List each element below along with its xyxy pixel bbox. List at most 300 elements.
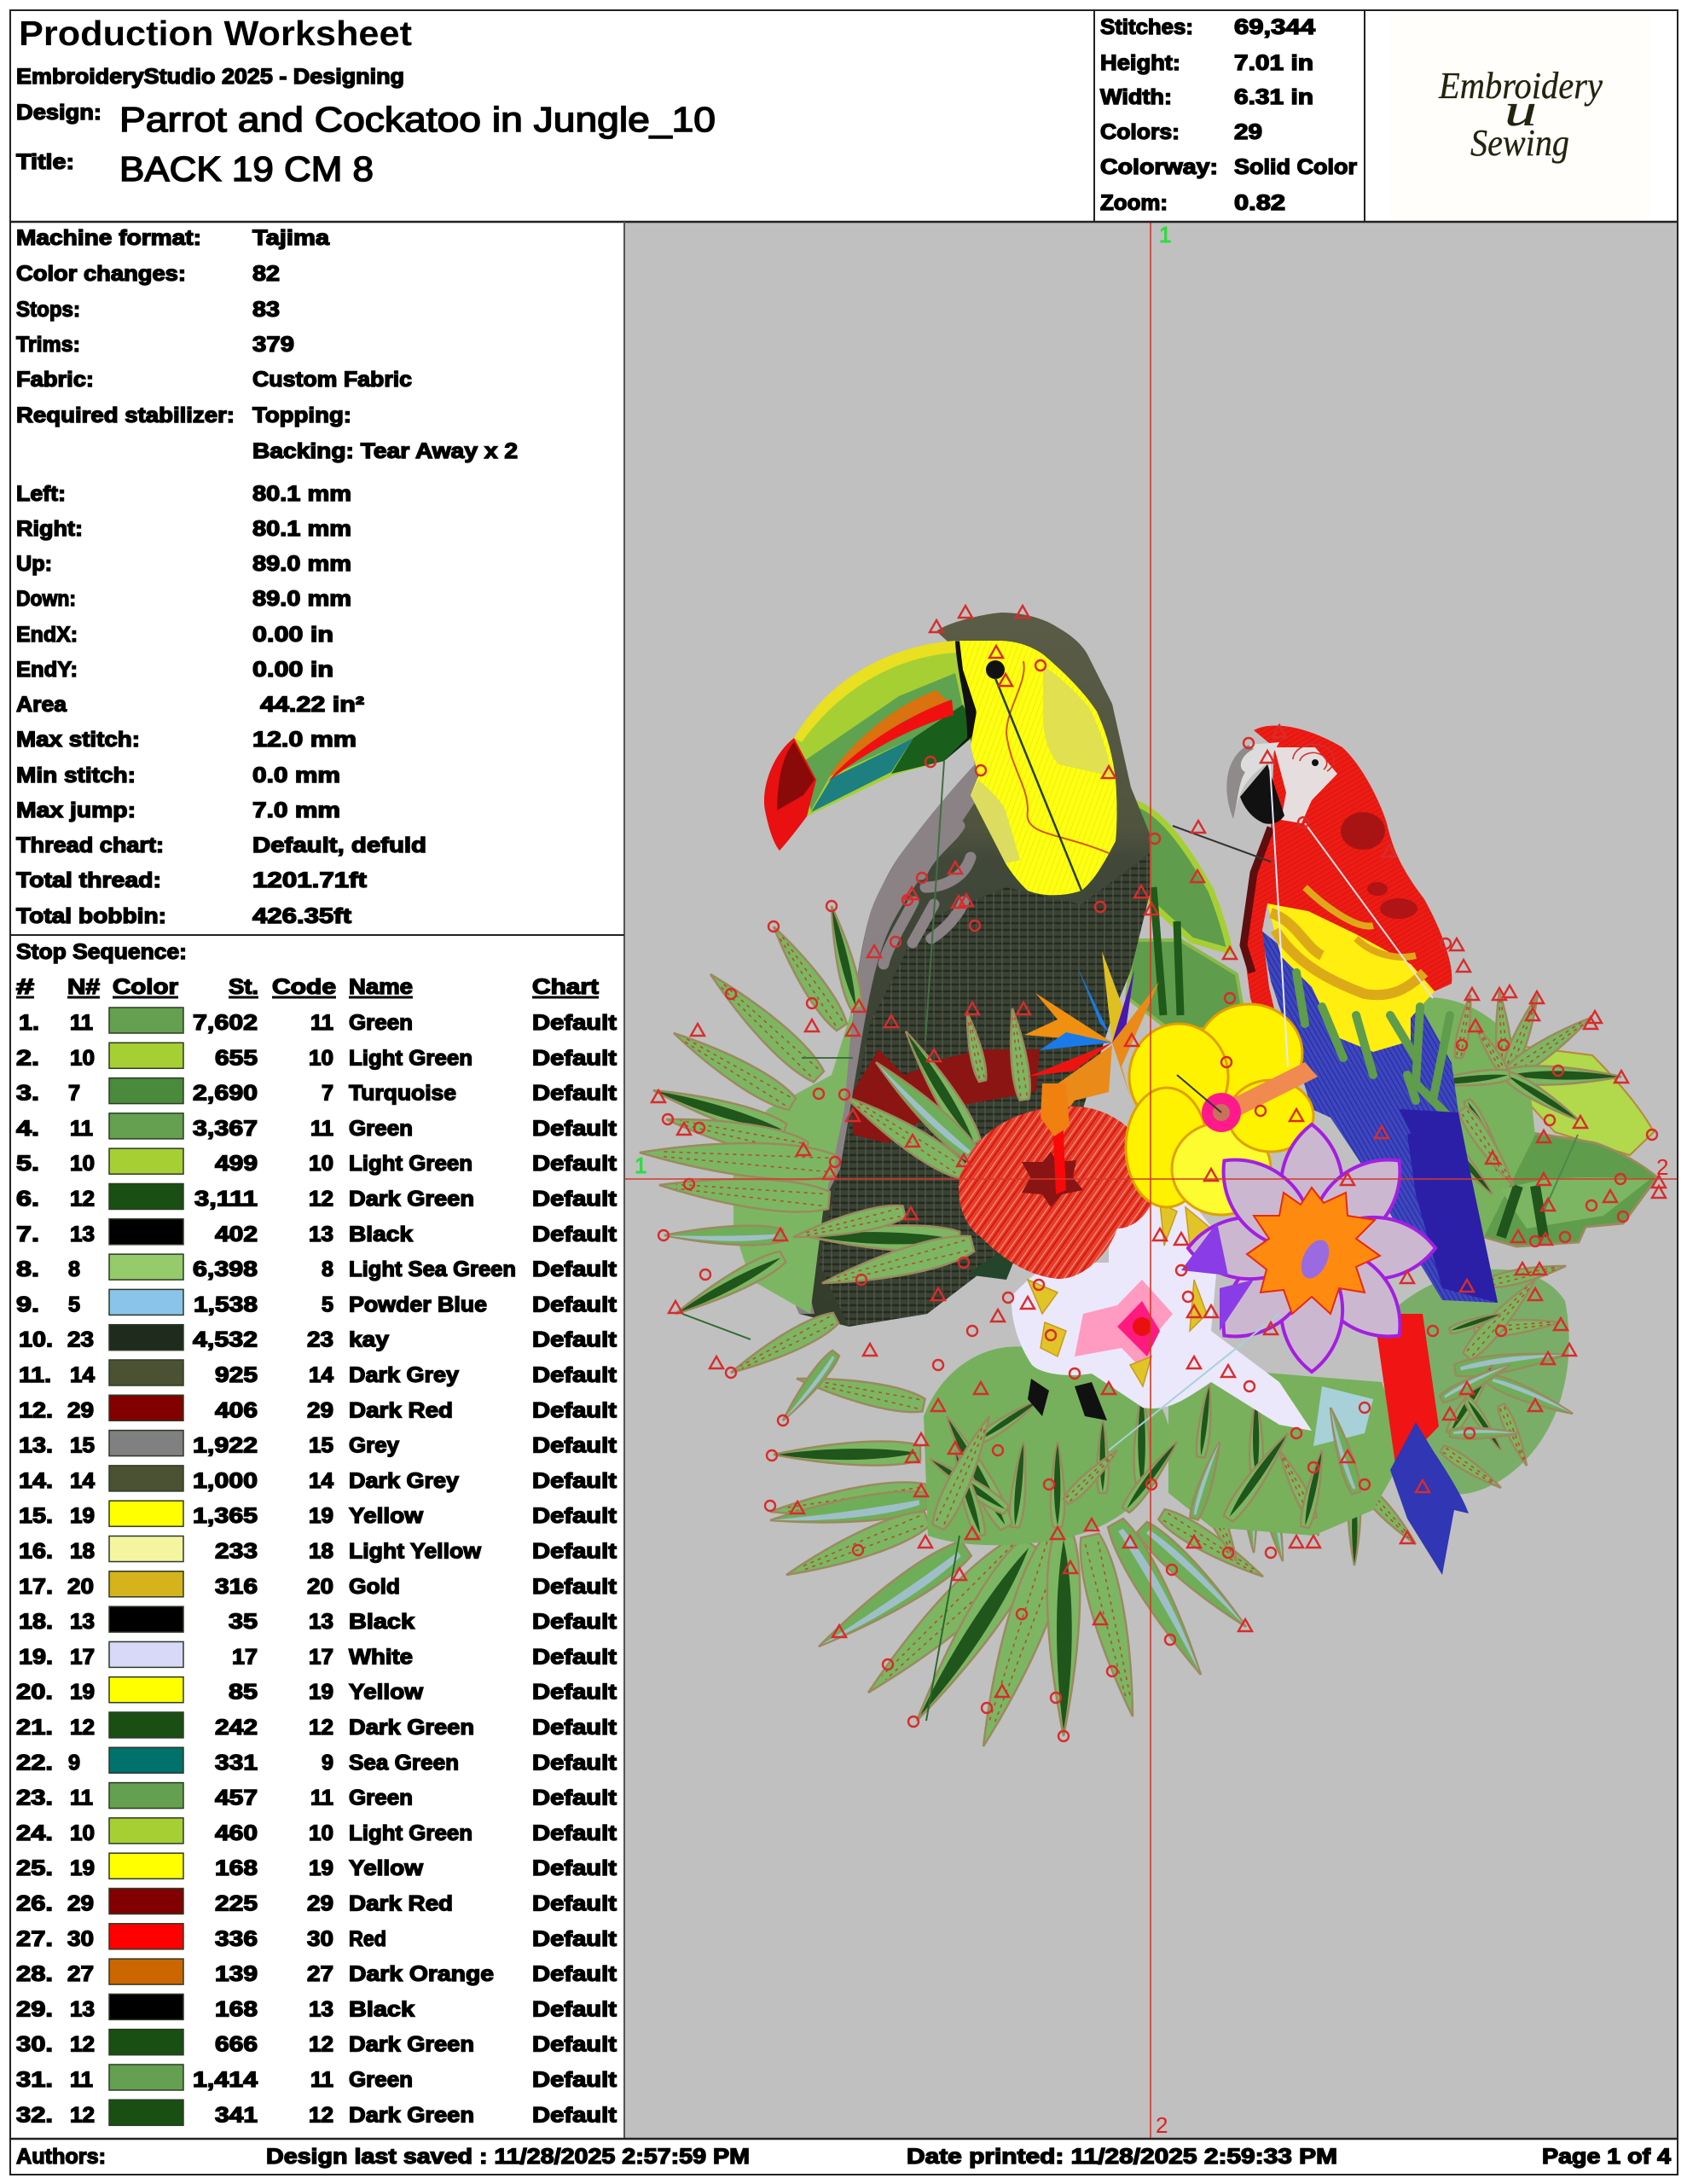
row 8: Default: [532, 1258, 617, 1281]
toucan: [764, 613, 1150, 1327]
row 26: 29: [67, 1892, 94, 1916]
axis label 1 left: 1: [635, 1153, 646, 1178]
machine and design details: Backing: Tear Away x 2: [252, 439, 518, 463]
row 30: Default: [532, 2033, 617, 2057]
table column headers: St.: [229, 975, 258, 999]
row 32: 341: [215, 2103, 258, 2127]
title value: BACK 19 CM 8: [119, 149, 374, 189]
row 23: 457: [215, 1786, 258, 1810]
row 29: 13: [70, 1997, 95, 2021]
row 25: 25.: [16, 1856, 53, 1880]
row 30: 12: [70, 2033, 95, 2057]
footer: Date printed: 11/28/2025 2:59:33 PM: [907, 2145, 1337, 2169]
row 26: Default: [532, 1892, 617, 1916]
row 24: 460: [215, 1821, 258, 1845]
row 10: [19, 1325, 617, 1352]
center crosshair lines: [625, 223, 1677, 2139]
row 22: 9: [68, 1751, 80, 1774]
row 28: 27: [307, 1962, 333, 1986]
macaw face: [1274, 747, 1337, 823]
heading block: [16, 14, 716, 189]
machine and design details: 0.00 in: [252, 658, 333, 682]
row 19: 17: [309, 1645, 333, 1669]
table column headers: Color: [113, 975, 178, 999]
machine and design details: Custom Fabric: [252, 368, 412, 392]
row 17: 17.: [19, 1575, 53, 1599]
machine and design details: 0.00 in: [252, 623, 333, 647]
row 6: Default: [532, 1188, 617, 1211]
row 4: Green: [349, 1117, 413, 1141]
row 27: 336: [215, 1927, 258, 1951]
design summary stats: 29: [1234, 120, 1262, 144]
row 1: Green: [349, 1011, 413, 1035]
machine and design details: 44.22 in²: [260, 693, 364, 717]
machine and design details: Color changes:: [16, 262, 186, 286]
stop sequence table: [16, 940, 617, 2127]
row 22: 331: [215, 1751, 258, 1774]
row 9: 5: [68, 1292, 80, 1316]
lower right leaf cluster: [1399, 1259, 1575, 1494]
row 14: [19, 1466, 617, 1493]
row 5: 499: [215, 1152, 258, 1176]
row 5: 10: [70, 1152, 95, 1176]
logo: Embroidery U Sewing: u: [1504, 84, 1537, 136]
row 24: 10: [309, 1821, 333, 1845]
macaw green feathers: [1296, 973, 1450, 1118]
row 5: 10: [309, 1152, 333, 1176]
row 23: 11: [70, 1786, 93, 1810]
row 20: 19: [70, 1681, 95, 1705]
machine and design details: 7.0 mm: [252, 799, 340, 822]
row 29: [16, 1994, 617, 2021]
row 25: 19: [309, 1856, 333, 1880]
machine and design details: Machine format:: [16, 226, 201, 250]
row 12: 12.: [19, 1398, 53, 1422]
row 30: 666: [215, 2033, 258, 2057]
row 4: [16, 1113, 617, 1141]
row 7: [16, 1219, 617, 1246]
row 2: 2.: [16, 1046, 39, 1070]
row 19: White: [349, 1645, 413, 1669]
row 17: 20: [307, 1575, 333, 1599]
row 7: 7.: [16, 1223, 39, 1246]
row 2: 10: [309, 1046, 333, 1070]
row 10: 23: [307, 1328, 333, 1352]
macaw: [1226, 726, 1498, 1575]
machine and design details: [16, 226, 518, 928]
machine and design details: Area: [16, 693, 67, 717]
row 11: 925: [215, 1363, 258, 1387]
row 6: [16, 1184, 617, 1211]
row 32: Default: [532, 2103, 617, 2127]
row 11: Dark Grey: [349, 1363, 459, 1387]
design name: Parrot and Cockatoo in Jungle_10: [119, 100, 716, 139]
row 26: 26.: [16, 1892, 53, 1916]
row 4: 3,367: [193, 1117, 258, 1141]
design label: Design:: [16, 101, 101, 125]
row 3: 7: [68, 1082, 80, 1106]
row 27: 30: [307, 1927, 333, 1951]
row 21: Default: [532, 1716, 617, 1740]
row 1: Default: [532, 1011, 617, 1035]
row 3: Default: [532, 1082, 617, 1106]
row 12: Default: [532, 1398, 617, 1422]
row 5: Light Green: [349, 1152, 472, 1176]
table column headers: [16, 975, 600, 999]
row 19: 17: [70, 1645, 95, 1669]
row 29: 13: [309, 1997, 333, 2021]
row 13: Grey: [349, 1434, 399, 1458]
row 19: 19.: [19, 1645, 53, 1669]
row 25: Default: [532, 1856, 617, 1880]
machine and design details: EndX:: [16, 623, 78, 647]
row 17: Gold: [349, 1575, 400, 1599]
row 30: [16, 2030, 617, 2057]
machine and design details: Topping:: [252, 404, 351, 427]
machine and design details: Right:: [16, 517, 83, 541]
row 9: Default: [532, 1292, 617, 1316]
axis label 2 bottom: 2: [1156, 2112, 1168, 2138]
logo: Embroidery U Sewing: Embroidery: [1438, 65, 1603, 107]
white plumeria flower: [1012, 1194, 1312, 1431]
row 2: 10: [70, 1046, 95, 1070]
row 31: Default: [532, 2068, 617, 2092]
machine and design details: 80.1 mm: [252, 482, 351, 506]
row 28: 139: [215, 1962, 258, 1986]
machine and design details: Stops:: [16, 298, 80, 322]
row 14: 14: [309, 1469, 333, 1493]
row 28: [16, 1959, 617, 1986]
design summary stats: 7.01 in: [1234, 51, 1313, 75]
macaw lower wing over purple flower: [1399, 1109, 1498, 1303]
row 18: 18.: [19, 1610, 53, 1634]
row 17: [19, 1571, 617, 1599]
stitch connector lines: [682, 751, 1578, 1721]
design summary stats: Colors:: [1100, 120, 1180, 144]
row 20: Default: [532, 1681, 617, 1705]
logo: Embroidery U Sewing: Sewing: [1470, 122, 1569, 164]
machine and design details: 89.0 mm: [252, 587, 351, 611]
row 4: 4.: [16, 1117, 39, 1141]
row 19: [19, 1641, 617, 1669]
row 9: Powder Blue: [349, 1292, 487, 1316]
machine and design details: 82: [252, 262, 280, 286]
row 26: [16, 1889, 617, 1916]
row 17: 20: [67, 1575, 94, 1599]
row 10: kay: [349, 1328, 389, 1352]
row 9: [16, 1289, 617, 1316]
row 8: Light Sea Green: [349, 1258, 516, 1281]
row 29: 29.: [16, 1997, 53, 2021]
row 14: 1,000: [193, 1469, 258, 1493]
row 22: 9: [322, 1751, 333, 1774]
machine and design details: 379: [252, 333, 294, 357]
machine and design details: Total bobbin:: [16, 904, 166, 928]
table column headers: #: [16, 975, 34, 999]
row 18: Default: [532, 1610, 617, 1634]
machine and design details: Down:: [16, 587, 76, 611]
yellow hibiscus flower: [1126, 1004, 1318, 1215]
machine and design details: 426.35ft: [252, 904, 352, 928]
row 7: 13: [309, 1223, 333, 1246]
row 12: [19, 1395, 617, 1422]
row 16: Default: [532, 1539, 617, 1563]
row 15: 15.: [19, 1504, 53, 1528]
row 19: 17: [232, 1645, 258, 1669]
row 6: 12: [70, 1188, 95, 1211]
row 7: 402: [215, 1223, 258, 1246]
row 13: 13.: [19, 1434, 53, 1458]
machine and design details: Fabric:: [16, 368, 94, 392]
row 14: 14: [70, 1469, 95, 1493]
row 10: 23: [67, 1328, 94, 1352]
table column headers: Chart: [532, 975, 600, 999]
row 16: 18: [70, 1539, 95, 1563]
row 25: 168: [215, 1856, 258, 1880]
row 6: 6.: [16, 1188, 39, 1211]
row 23: [16, 1783, 617, 1810]
machine and design details: Max stitch:: [16, 728, 140, 752]
row 28: 28.: [16, 1962, 53, 1986]
row 25: [16, 1853, 617, 1880]
row 31: [16, 2065, 617, 2092]
needle markers: [652, 606, 1666, 1741]
row 8: 8: [322, 1258, 333, 1281]
machine and design details: Left:: [16, 482, 66, 506]
row 11: 14: [309, 1363, 333, 1387]
row 30: Dark Green: [349, 2033, 474, 2057]
row 3: 7: [322, 1082, 333, 1106]
row 4: Default: [532, 1117, 617, 1141]
row 29: Default: [532, 1997, 617, 2021]
row 8: [16, 1254, 617, 1281]
row 14: Dark Grey: [349, 1469, 459, 1493]
row 13: 15: [70, 1434, 95, 1458]
row 10: 10.: [19, 1328, 53, 1352]
row 15: 1,365: [193, 1504, 258, 1528]
row 9: 9.: [16, 1292, 39, 1316]
machine and design details: 12.0 mm: [252, 728, 357, 752]
row 12: 29: [307, 1398, 333, 1422]
toucan yellow face: [959, 641, 1117, 895]
row 32: 12: [309, 2103, 333, 2127]
row 12: 29: [67, 1398, 94, 1422]
row 24: 10: [70, 1821, 95, 1845]
machine and design details: 1201.71ft: [252, 868, 368, 892]
machine and design details: 0.0 mm: [252, 764, 340, 787]
row 3: [16, 1078, 617, 1106]
row 18: 13: [70, 1610, 95, 1634]
row 5: 5.: [16, 1152, 39, 1176]
artwork panel: grey fabric: [624, 222, 1677, 2139]
row 1: [19, 1008, 617, 1035]
row 16: [19, 1536, 617, 1563]
row 11: 11.: [19, 1363, 51, 1387]
row 30: 30.: [16, 2033, 53, 2057]
row 28: 27: [67, 1962, 94, 1986]
title label: Title:: [16, 150, 74, 174]
row 23: 23.: [16, 1786, 53, 1810]
row 21: [16, 1712, 617, 1740]
table column headers: N#: [67, 975, 100, 999]
row 31: 11: [70, 2068, 93, 2092]
design summary stats: Height:: [1100, 51, 1180, 75]
machine and design details: 80.1 mm: [252, 517, 351, 541]
machine and design details: 83: [252, 298, 280, 322]
row 31: 31.: [16, 2068, 53, 2092]
row 26: Dark Red: [349, 1892, 453, 1916]
row 12: 406: [215, 1398, 258, 1422]
macaw blue body: [1261, 930, 1498, 1303]
row 1: 11: [310, 1011, 333, 1035]
row 21: 12: [70, 1716, 95, 1740]
row 15: Yellow: [349, 1504, 424, 1528]
design summary stats: Solid Color: [1234, 155, 1357, 179]
purple passion flower: [1181, 1124, 1435, 1372]
row 32: Dark Green: [349, 2103, 474, 2127]
red hibiscus flower: [959, 1083, 1155, 1279]
row 9: 5: [322, 1292, 333, 1316]
design summary stats: 6.31 in: [1234, 85, 1313, 109]
row 32: 32.: [16, 2103, 53, 2127]
row 6: 12: [309, 1188, 333, 1211]
software line: EmbroideryStudio 2025 - Designing: [16, 65, 404, 89]
row 20: Yellow: [349, 1681, 424, 1705]
table column headers: Code: [272, 975, 336, 999]
machine and design details: Max jump:: [16, 799, 136, 822]
row 4: 11: [310, 1117, 333, 1141]
row 18: [19, 1606, 617, 1634]
axis label 2 right: 2: [1656, 1154, 1668, 1180]
toucan eye: [986, 660, 1005, 679]
row 21: Dark Green: [349, 1716, 474, 1740]
table heading: Stop Sequence:: [16, 940, 187, 964]
row 16: 18: [309, 1539, 333, 1563]
machine and design details: Min stitch:: [16, 764, 136, 787]
row 21: 21.: [16, 1716, 53, 1740]
row 1: 1.: [19, 1011, 39, 1035]
design summary stats: Stitches:: [1100, 15, 1193, 39]
row 14: 14.: [19, 1469, 53, 1493]
footer: Page 1 of 4: [1542, 2145, 1671, 2169]
row 7: Default: [532, 1223, 617, 1246]
machine and design details: 89.0 mm: [252, 552, 351, 576]
toucan dark red belly patches: [853, 1049, 1040, 1143]
row 18: 13: [309, 1610, 333, 1634]
row 2: Light Green: [349, 1046, 472, 1070]
row 13: Default: [532, 1434, 617, 1458]
background monstera leaves behind toucan: [1127, 803, 1245, 1032]
row 27: 27.: [16, 1927, 53, 1951]
macaw tail: [1374, 1314, 1439, 1470]
macaw beak: [1226, 742, 1279, 819]
row 11: [19, 1360, 617, 1387]
row 11: 14: [70, 1363, 95, 1387]
row 25: 19: [70, 1856, 95, 1880]
row 20: 19: [309, 1681, 333, 1705]
row 23: 11: [310, 1786, 333, 1810]
design summary stats: Width:: [1100, 85, 1172, 109]
row 2: Default: [532, 1046, 617, 1070]
front palm leaves: [639, 904, 1032, 1425]
row 22: 22.: [16, 1751, 53, 1774]
row 30: 12: [309, 2033, 333, 2057]
row 2: [16, 1043, 617, 1070]
macaw yellow wing: [1267, 903, 1435, 1052]
row 13: [19, 1431, 617, 1458]
central fan disk: [924, 1346, 1407, 1545]
row 22: [16, 1747, 617, 1774]
row 27: Default: [532, 1927, 617, 1951]
machine and design details: EndY:: [16, 658, 78, 682]
row 24: [16, 1818, 617, 1845]
row 13: 1,922: [193, 1434, 258, 1458]
row 5: [16, 1148, 617, 1176]
row 15: 19: [70, 1504, 95, 1528]
footer: Design last saved : 11/28/2025 2:57:59 PM: [266, 2145, 750, 2169]
row 7: 13: [70, 1223, 95, 1246]
title: Production Worksheet: [19, 14, 412, 53]
row 16: Light Yellow: [349, 1539, 482, 1563]
row 24: 24.: [16, 1821, 53, 1845]
row 27: Red: [349, 1927, 386, 1951]
toucan body: [786, 613, 1150, 1327]
row 18: 35: [229, 1610, 258, 1634]
row 15: [19, 1501, 617, 1528]
row 1: 11: [70, 1011, 93, 1035]
row 20: [16, 1677, 617, 1705]
row 2: 655: [215, 1046, 258, 1070]
row 15: 19: [309, 1504, 333, 1528]
footer: Authors:: [16, 2145, 106, 2169]
row 8: 8.: [16, 1258, 39, 1281]
row 31: Green: [349, 2068, 413, 2092]
row 27: [16, 1924, 617, 1951]
row 23: Green: [349, 1786, 413, 1810]
row 3: 3.: [16, 1082, 39, 1106]
logo: Embroidery U Sewing: [1389, 13, 1652, 220]
row 19: Default: [532, 1645, 617, 1669]
row 16: 16.: [19, 1539, 53, 1563]
row 6: Dark Green: [349, 1188, 474, 1211]
row 26: 29: [307, 1892, 333, 1916]
row 10: Default: [532, 1328, 617, 1352]
machine and design details: Thread chart:: [16, 834, 164, 857]
row 32: [16, 2100, 617, 2127]
row 31: 11: [310, 2068, 333, 2092]
row 28: Dark Orange: [349, 1962, 494, 1986]
design summary stats: Colorway:: [1100, 155, 1218, 179]
footer: [16, 2145, 1671, 2169]
row 26: 225: [215, 1892, 258, 1916]
macaw red body: [1244, 726, 1452, 1067]
bird of paradise flower: [1024, 951, 1159, 1126]
embroidery artwork: [639, 606, 1666, 1753]
row 11: Default: [532, 1363, 617, 1387]
row 3: Turquoise: [349, 1082, 456, 1106]
row 32: 12: [70, 2103, 95, 2127]
row 20: 20.: [16, 1681, 53, 1705]
axis label 1 top: 1: [1159, 222, 1171, 247]
row 4: 11: [70, 1117, 93, 1141]
toucan chest hatching: [819, 853, 1150, 1327]
design summary stats: Zoom:: [1100, 191, 1168, 215]
row 28: Default: [532, 1962, 617, 1986]
row 23: Default: [532, 1786, 617, 1810]
machine and design details: Required stabilizer:: [16, 404, 235, 427]
right leaf cluster: [1416, 990, 1657, 1314]
row 24: Light Green: [349, 1821, 472, 1845]
